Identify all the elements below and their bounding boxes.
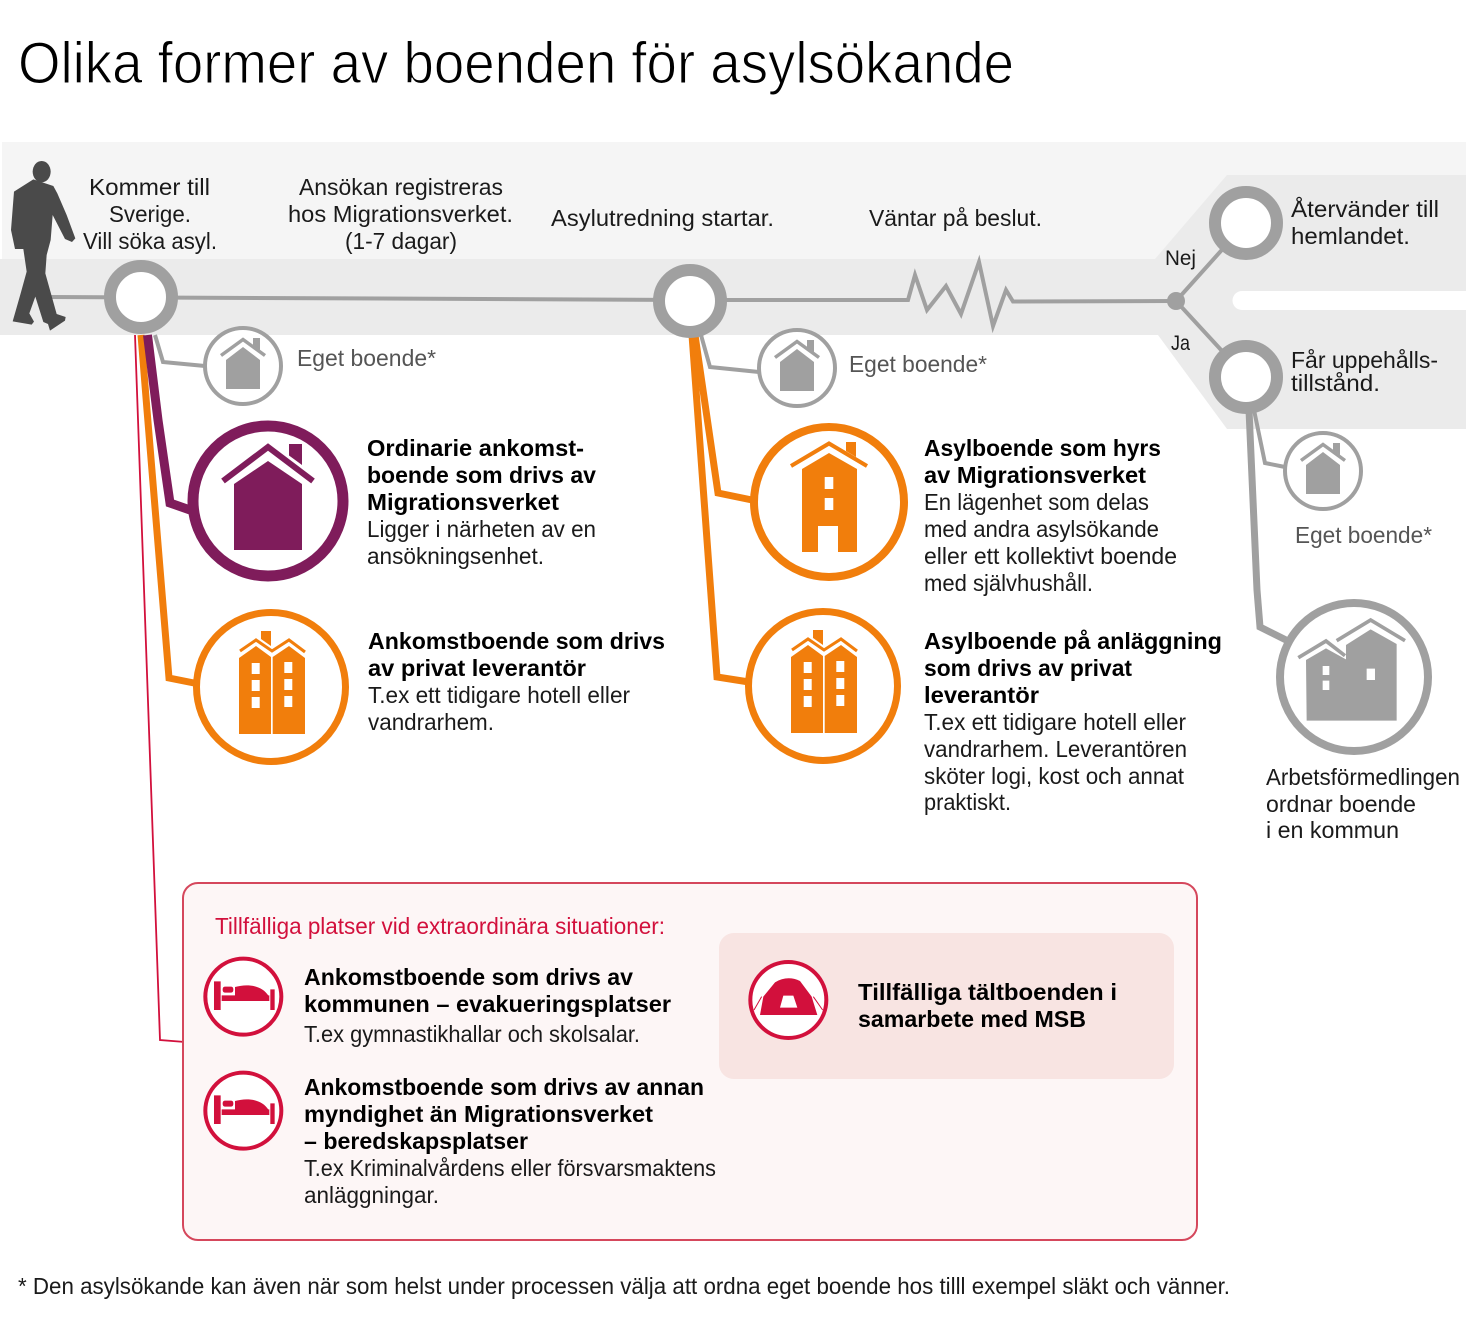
text: municipal housing: i en kommun	[1266, 817, 1399, 843]
icon: bed 1	[205, 959, 281, 1035]
path: orange line to rented housing	[695, 335, 752, 500]
timeline background band	[0, 142, 1466, 429]
label: no: Nej	[1165, 247, 1196, 270]
text: other authority standby places: anläggningar.	[304, 1182, 439, 1208]
label: yes: Ja	[1171, 332, 1190, 355]
step label: arrival	[83, 174, 217, 254]
panel heading: Tillfälliga platser vid extraordinära situationer:	[215, 913, 665, 939]
text: temporary tents	[858, 979, 1117, 1032]
text: rented asylum housing: av Migrationsverket	[924, 462, 1146, 488]
icon: own housing 3	[1285, 433, 1361, 509]
text: temporary tents: samarbete med MSB	[858, 1006, 1086, 1032]
text: temporary tents: Tillfälliga tältboenden i	[858, 979, 1117, 1005]
icon: bed 2	[205, 1073, 281, 1149]
icon: own housing 2	[759, 330, 835, 406]
step label: return: Återvänder till	[1291, 195, 1439, 222]
panel: temporary places	[183, 883, 1197, 1240]
label: own housing 1: Eget boende*	[297, 345, 436, 371]
text: asylum facility housing: Asylboende på anläggning	[924, 628, 1222, 654]
timeline line with decision zigzag	[50, 262, 1176, 326]
path: red line to temporary places	[135, 335, 185, 1042]
path: purple line to ordinary arrival housing	[148, 335, 190, 510]
text: private arrival housing: T.ex ett tidigare hotell eller	[368, 682, 630, 708]
step circle: investigation	[659, 270, 721, 332]
step label: registration: (1-7 dagar)	[345, 228, 457, 254]
label: own housing 2: Eget boende*	[849, 351, 987, 377]
text: municipal housing: Arbetsförmedlingen	[1266, 764, 1460, 790]
text: rented asylum housing: med självhushåll.	[924, 570, 1093, 596]
icon: purple house	[193, 426, 343, 576]
icon: orange twin buildings (facility)	[748, 612, 898, 760]
step circle: return	[1215, 192, 1277, 254]
step label: registration	[288, 174, 513, 254]
text: other authority standby places: – beredskapsplatser	[304, 1128, 528, 1154]
text: municipal evacuation places	[304, 964, 671, 1047]
footnote: * Den asylsökande kan även när som helst under processen välja att ordna eget boende hos tilll exempel släkt och vänner.	[18, 1273, 1230, 1299]
text: private arrival housing: Ankomstboende som drivs	[368, 628, 665, 654]
text: private arrival housing: vandrarhem.	[368, 709, 494, 735]
icon: orange twin buildings (private provider)	[196, 612, 346, 762]
text: ordinary arrival housing: Ligger i närheten av en	[367, 516, 596, 542]
step label: residence permit: tillstånd.	[1291, 370, 1380, 396]
text: asylum facility housing: vandrarhem. Leverantören	[924, 736, 1187, 762]
step label: arrival: Sverige.	[109, 201, 191, 227]
person silhouette	[11, 161, 75, 331]
text: other authority standby places: myndighet än Migrationsverket	[304, 1101, 653, 1127]
text: municipal evacuation places: T.ex gymnastikhallar och skolsalar.	[304, 1021, 640, 1047]
text: ordinary arrival housing	[367, 435, 596, 569]
title: Olika former av boenden för asylsökande	[18, 31, 1014, 96]
path: grey line to own housing 1	[155, 335, 205, 366]
text: asylum facility housing: som drivs av privat	[924, 655, 1132, 681]
text: rented asylum housing: eller ett kollektivt boende	[924, 543, 1177, 569]
icon: own housing 1	[205, 328, 281, 404]
text: municipal evacuation places: kommunen – evakueringsplatser	[304, 991, 671, 1017]
path: grey line to own housing 2	[701, 335, 759, 372]
text: asylum facility housing: T.ex ett tidigare hotell eller	[924, 709, 1186, 735]
step label: investigation: Asylutredning startar.	[551, 205, 774, 231]
step label: residence permit	[1291, 347, 1438, 396]
step label: arrival: Vill söka asyl.	[83, 228, 217, 254]
text: other authority standby places	[304, 1074, 716, 1208]
text: asylum facility housing	[924, 628, 1222, 815]
text: municipal housing	[1266, 764, 1460, 843]
icon: orange apartment building	[754, 427, 904, 577]
text: ordinary arrival housing: Ordinarie ankomst-	[367, 435, 584, 461]
text: asylum facility housing: leverantör	[924, 682, 1039, 708]
sub-panel: tents	[719, 933, 1174, 1079]
step label: registration: Ansökan registreras	[299, 174, 503, 200]
path: grey line to own housing 3	[1254, 410, 1285, 467]
text: ordinary arrival housing: Migrationsverket	[367, 489, 559, 515]
step label: arrival: Kommer till	[89, 174, 210, 200]
label: own housing 3: Eget boende*	[1295, 522, 1432, 548]
text: asylum facility housing: praktiskt.	[924, 789, 1011, 815]
icon: tent	[750, 962, 826, 1038]
text: private arrival housing: av privat leverantör	[368, 655, 586, 681]
path: decision branches	[1176, 223, 1246, 377]
step label: residence permit: Får uppehålls-	[1291, 347, 1438, 373]
text: municipal evacuation places: Ankomstboende som drivs av	[304, 964, 633, 990]
step circle: residence permit	[1215, 346, 1277, 408]
path: grey line to municipality housing	[1249, 410, 1288, 641]
text: rented asylum housing: med andra asylsökande	[924, 516, 1159, 542]
text: municipal housing: ordnar boende	[1266, 791, 1416, 817]
text: rented asylum housing: Asylboende som hyrs	[924, 435, 1161, 461]
text: rented asylum housing	[924, 435, 1177, 596]
text: ordinary arrival housing: ansökningsenhet.	[367, 543, 544, 569]
step label: return: hemlandet.	[1291, 223, 1410, 249]
step circle: arrival	[110, 266, 172, 328]
icon: grey municipal buildings	[1280, 603, 1428, 751]
step label: waiting: Väntar på beslut.	[869, 205, 1042, 231]
step label: registration: hos Migrationsverket.	[288, 201, 513, 227]
decision node	[1167, 292, 1185, 310]
path: orange line to facility housing	[692, 335, 749, 682]
text: other authority standby places: Ankomstboende som drivs av annan	[304, 1074, 704, 1100]
text: private arrival housing	[368, 628, 665, 735]
text: other authority standby places: T.ex Kriminalvårdens eller försvarsmaktens	[304, 1155, 716, 1181]
text: rented asylum housing: En lägenhet som delas	[924, 489, 1149, 515]
step label: return	[1291, 195, 1439, 249]
path: orange line to private arrival housing	[141, 335, 194, 683]
text: ordinary arrival housing: boende som drivs av	[367, 462, 596, 488]
text: asylum facility housing: sköter logi, kost och annat	[924, 763, 1185, 789]
